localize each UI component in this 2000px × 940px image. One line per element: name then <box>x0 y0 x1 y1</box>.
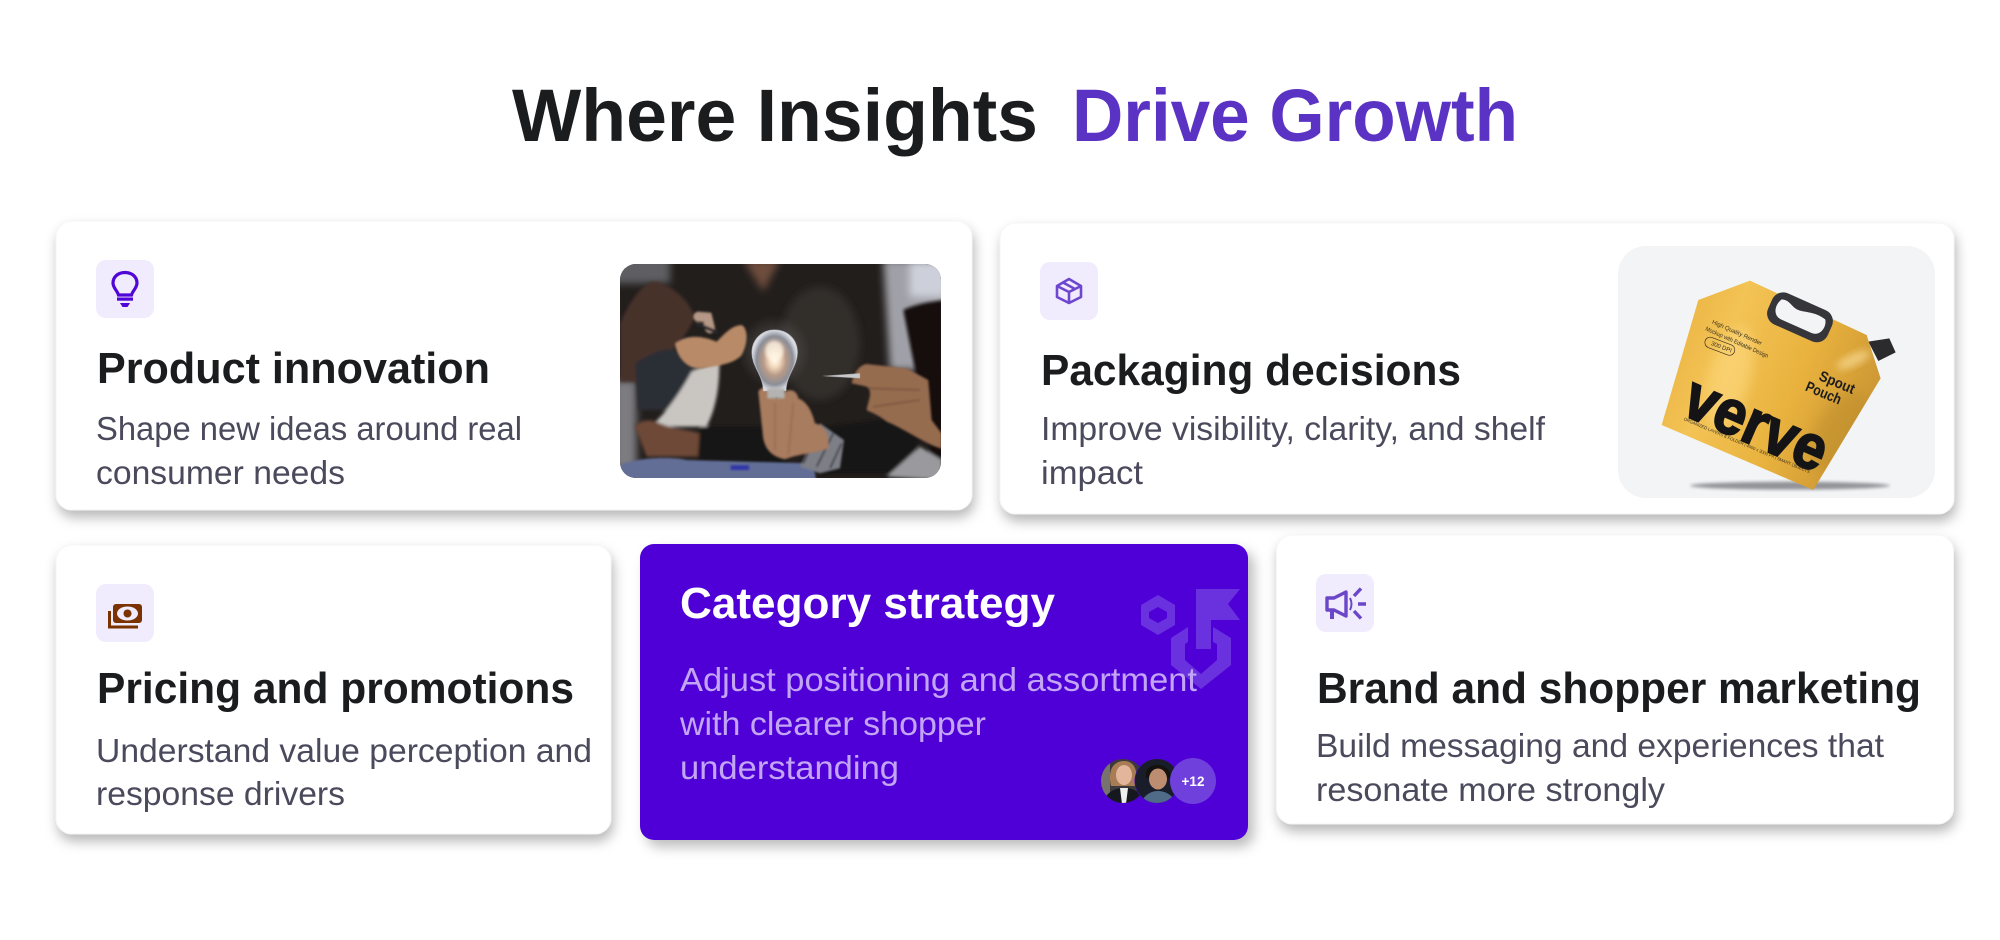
image: verve spout pouch: 300 DPI <box>1710 341 1733 355</box>
image: verve spout pouch: verve <box>1674 362 1839 486</box>
image: verve spout pouch: Mockup with Editable Design <box>1704 327 1769 360</box>
image: verve spout pouch <box>1618 246 1935 498</box>
description <box>96 410 522 491</box>
description: Adjust positioning and assortment <box>680 661 1197 698</box>
icon: light bulb <box>96 260 154 318</box>
heading: Packaging decisions <box>1041 346 1461 395</box>
description: Build messaging and experiences that <box>1316 727 1884 764</box>
heading: Brand and shopper marketing <box>1317 664 1921 713</box>
title: Where Insights <box>512 74 1038 157</box>
panel: brand and shopper marketing <box>1276 535 1954 824</box>
description: consumer needs <box>96 454 345 491</box>
image: verve spout pouch: High Quality Render <box>1711 320 1763 347</box>
icon: faded hexagon and flag emblem <box>1141 589 1240 689</box>
panel: packaging decisions <box>1000 223 1954 514</box>
image: verve spout pouch: Pouch <box>1803 379 1844 408</box>
panel: product innovation <box>56 221 972 510</box>
description: impact <box>1041 454 1143 491</box>
heading: Pricing and promotions <box>97 664 574 713</box>
panel: pricing and promotions <box>56 545 611 834</box>
description <box>96 732 592 812</box>
description: Improve visibility, clarity, and shelf <box>1041 410 1546 447</box>
title: Drive Growth <box>1072 74 1518 157</box>
icon: package box <box>1040 262 1098 320</box>
description <box>1041 410 1546 491</box>
heading: Category strategy <box>680 579 1056 628</box>
title <box>512 74 1518 157</box>
description: understanding <box>680 749 899 786</box>
panel: category strategy <box>640 544 1248 840</box>
icon: banknotes <box>96 584 154 642</box>
description: Understand value perception and <box>96 732 592 769</box>
heading: Product innovation <box>97 344 490 393</box>
icon: megaphone <box>1316 574 1374 632</box>
description: with clearer shopper <box>679 705 986 742</box>
photo: hands holding a glowing light bulb <box>613 257 950 483</box>
avatars <box>1100 758 1216 804</box>
description: Shape new ideas around real <box>96 410 522 447</box>
description: response drivers <box>96 775 345 812</box>
image: verve spout pouch: Spout <box>1816 369 1857 398</box>
avatars: +12 <box>1182 774 1204 789</box>
description <box>679 661 1197 786</box>
description: resonate more strongly <box>1316 771 1666 808</box>
description <box>1316 727 1884 808</box>
image: verve spout pouch: ORGANIZED LAYERS & FOLDER | 4000 x 3000 PX | SMART OBJECTS <box>1683 416 1811 474</box>
